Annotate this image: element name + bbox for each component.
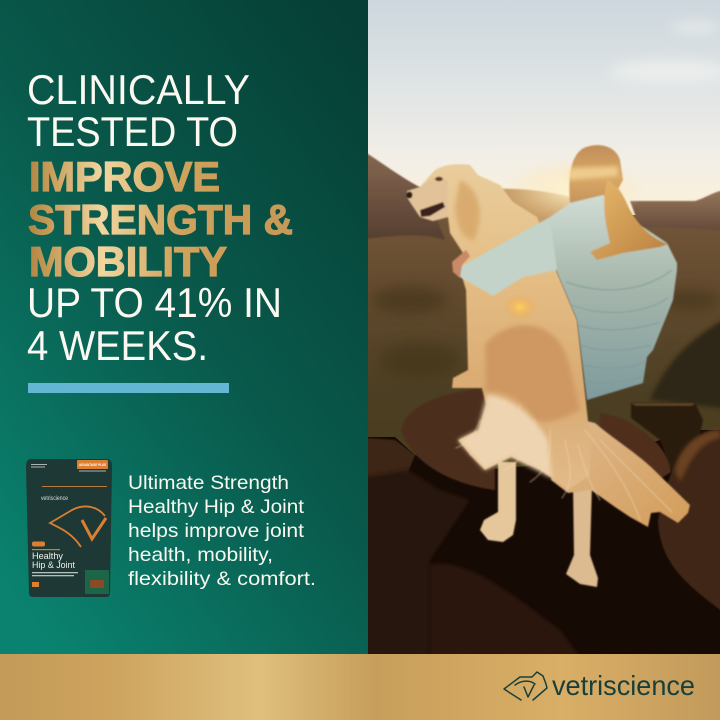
heading: closing lines [27,279,282,369]
description text: health, mobility, [128,544,273,566]
brand logo: vetriscience: vetriscience [552,670,695,701]
heading: intro lines: TESTED TO [27,108,238,155]
dog fur wisps [456,400,672,520]
pouch badge [77,460,108,469]
heading: gold emphasis: IMPROVE [29,153,220,200]
pouch orange divider text [42,486,107,487]
rocks [368,389,720,654]
dog eye [435,177,443,181]
woman hand [452,250,470,278]
heading: intro lines [27,66,250,155]
pouch title: Healthy [32,551,63,562]
description text: flexibility & comfort. [128,568,316,590]
dog neck shading [455,180,480,240]
far hill glowing [502,188,570,224]
dog [406,164,690,587]
logo icon: dog and V mark [504,672,547,700]
heading: closing lines: UP TO 41% IN [27,279,282,326]
product pouch [26,459,112,597]
description text: helps improve joint [128,520,305,542]
pouch dog mark [50,506,105,547]
pouch body copy [32,572,78,576]
sun glow [514,163,634,216]
woman ponytail [590,180,668,260]
woman arm [460,217,557,296]
woman head [569,145,623,203]
valley ground [368,215,720,469]
heading [27,66,293,369]
sky [368,0,720,215]
dog fluffy rear [485,325,580,422]
jacket quilting lines [566,270,672,383]
lens flare [506,296,534,318]
description text [128,472,316,590]
right hills [629,190,720,230]
dog feathering [458,395,552,478]
pouch brand: vetriscience [41,496,69,502]
dog tail [551,413,690,527]
photo: woman and golden retriever at sunset [350,0,720,670]
dog mouth [420,202,445,217]
dog body [407,164,590,490]
panel: green gradient background [0,0,368,654]
woman [452,145,677,400]
gold footer band [0,654,720,720]
woman jacket body [550,195,677,400]
description text: Ultimate Strength [128,472,289,494]
description text: Healthy Hip & Joint [128,496,305,518]
pouch chew window [85,570,109,594]
heading: intro lines: CLINICALLY [27,66,250,113]
dog face [417,180,447,221]
heading: closing lines: 4 WEEKS. [27,322,208,369]
hair sun streak [568,166,618,180]
dog hind legs [480,462,516,542]
product pouch: Hip & Joint [32,560,75,571]
dark scrub lower right [650,310,720,410]
pouch label [32,542,45,546]
heading: gold emphasis: STRENGTH & [28,196,293,243]
ground shading [372,286,720,378]
pouch fine print [31,464,106,472]
left mountain [368,153,444,240]
dog nose [406,192,412,198]
blue divider bar [28,383,229,393]
product pouch: ADVANTAGE PLUS [79,463,106,467]
clouds [610,22,720,84]
heading: gold emphasis: MOBILITY [29,238,227,285]
heading: gold emphasis [28,153,293,285]
